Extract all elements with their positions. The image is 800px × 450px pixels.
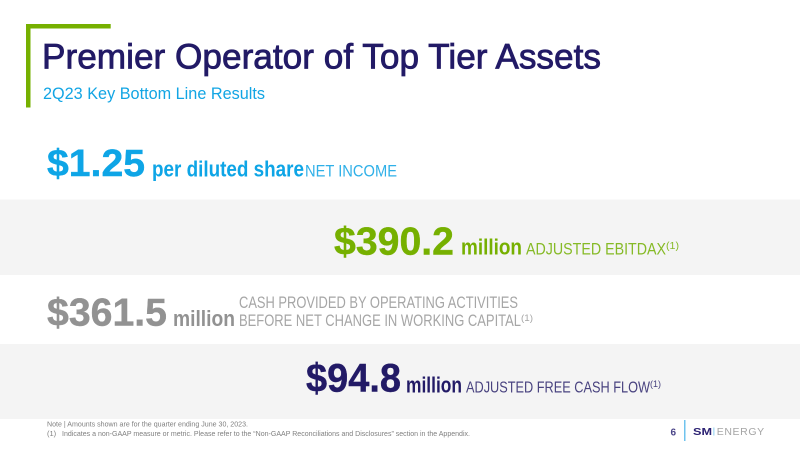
logo: SM Energy: SM xyxy=(693,426,712,438)
divider: footer rule xyxy=(684,420,686,441)
metric: adjusted free cash flow: (1) xyxy=(650,379,661,389)
metric: net income xyxy=(47,143,397,185)
page number: 6 xyxy=(670,428,676,438)
logo: SM Energy xyxy=(693,426,764,438)
footnotes xyxy=(47,420,470,438)
metric: adjusted EBITDAX: (1) xyxy=(666,241,679,252)
metric: adjusted EBITDAX: $390.2 xyxy=(334,220,454,263)
footnotes: Indicates a non-GAAP measure or metric. Please refer to the “Non-GAAP Reconciliations and Disclosures” section in the Appendix. xyxy=(62,429,470,438)
metric: net income: NET INCOME xyxy=(305,162,397,181)
metric: cash provided by operating activities xyxy=(47,291,533,334)
metric: adjusted EBITDAX: million xyxy=(461,234,522,259)
footnotes: (1) xyxy=(47,429,57,438)
metric: adjusted free cash flow: ADJUSTED FREE CASH FLOW xyxy=(466,379,651,396)
metric: cash provided by operating activities: $361.5 xyxy=(47,291,167,334)
subtitle: 2Q23 Key Bottom Line Results xyxy=(43,85,265,103)
metric: adjusted free cash flow: million xyxy=(406,372,462,397)
metric: adjusted free cash flow: $94.8 xyxy=(306,357,401,401)
metric: cash provided by operating activities: BEFORE NET CHANGE IN WORKING CAPITAL xyxy=(239,312,521,330)
logo: SM Energy: ENERGY xyxy=(717,426,764,438)
metric: adjusted EBITDAX xyxy=(334,220,679,263)
metric: adjusted free cash flow xyxy=(306,357,661,401)
metric: cash provided by operating activities: CASH PROVIDED BY OPERATING ACTIVITIES xyxy=(239,294,518,312)
metric: cash provided by operating activities: (1) xyxy=(521,313,533,323)
metric: adjusted EBITDAX: ADJUSTED EBITDAX xyxy=(526,240,666,258)
metric: net income: $1.25 xyxy=(47,143,145,185)
band: adjusted free cash flow background xyxy=(0,344,800,419)
metric: net income: per diluted share xyxy=(152,157,304,182)
metric: cash provided by operating activities: million xyxy=(173,306,235,331)
footnotes: Note | Amounts shown are for the quarter ending June 30, 2023. xyxy=(47,420,248,429)
band: adjusted EBITDAX background xyxy=(0,200,800,275)
icon: green title bracket xyxy=(26,24,111,108)
title: Premier Operator of Top Tier Assets xyxy=(42,36,601,76)
